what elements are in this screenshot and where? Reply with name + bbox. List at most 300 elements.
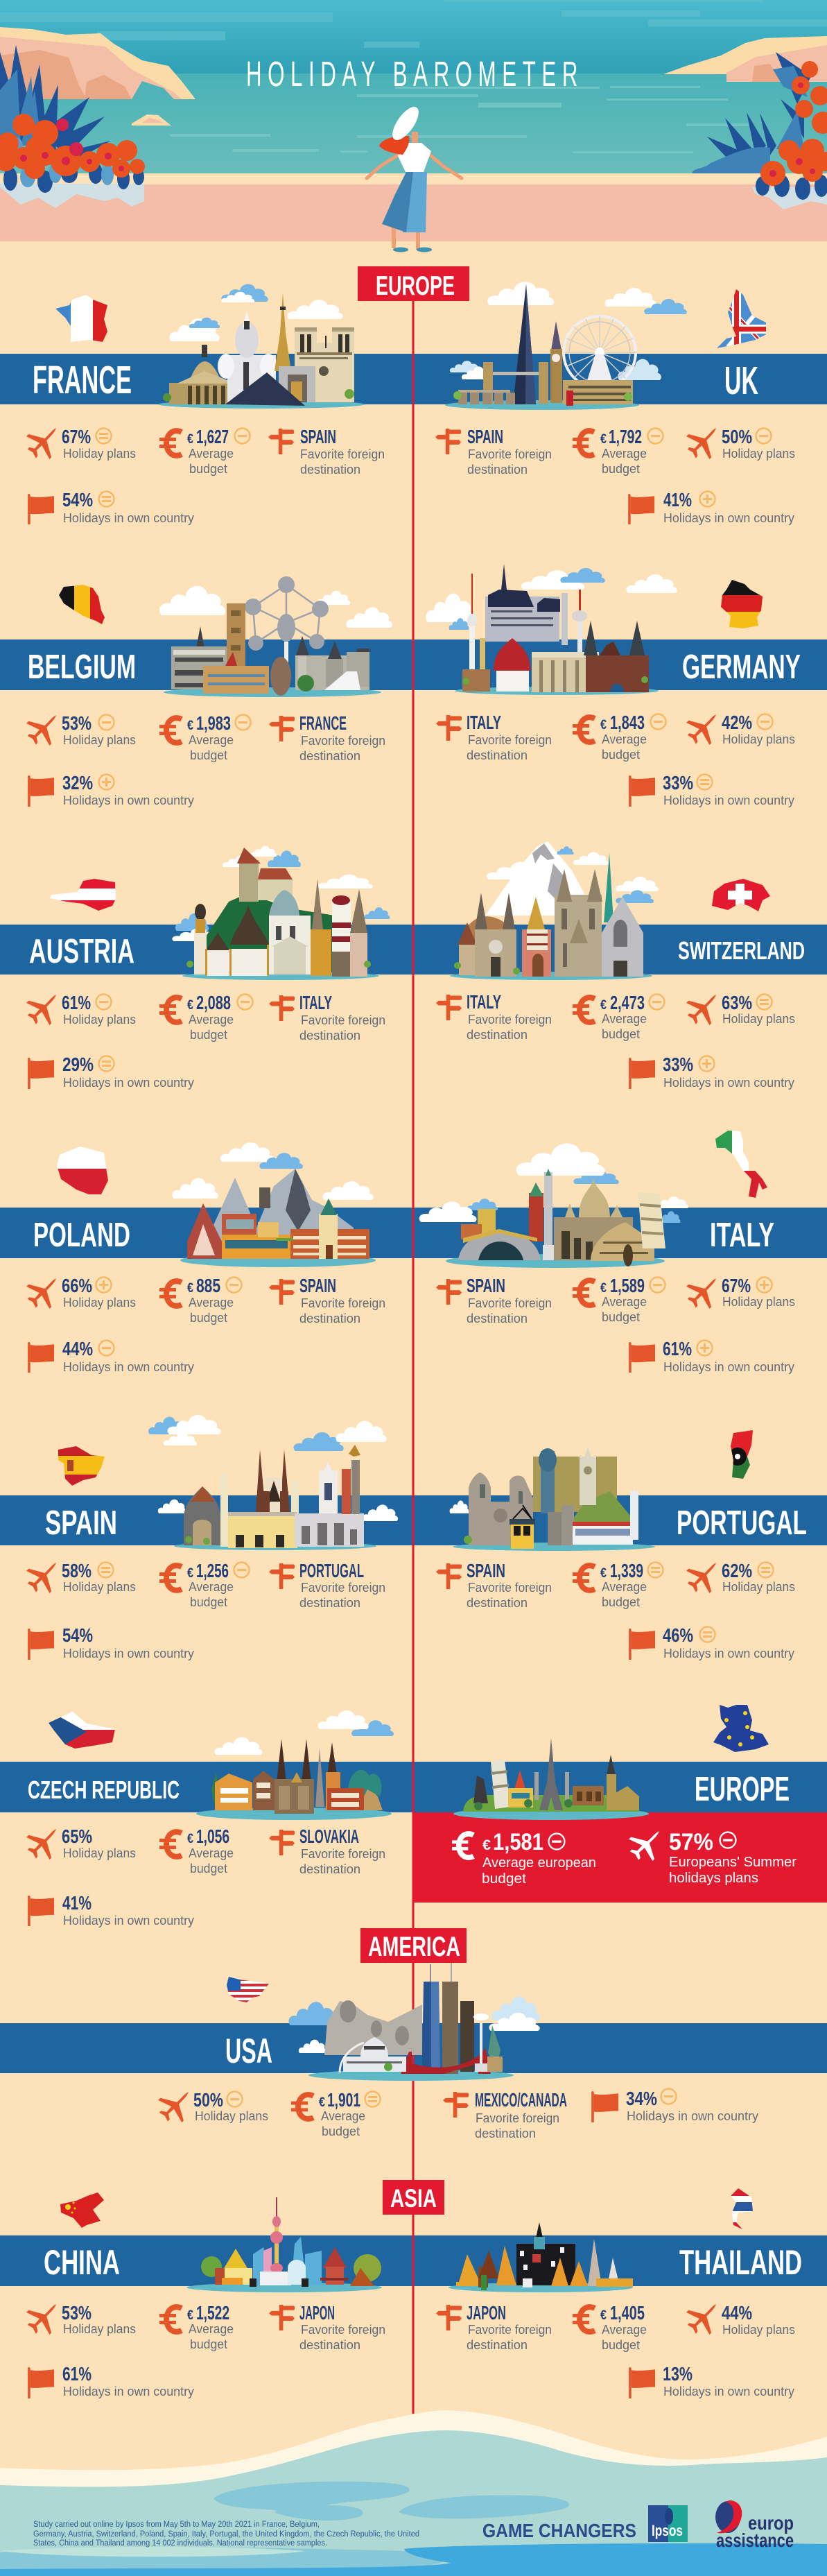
stat: average budget xyxy=(573,2302,647,2352)
map flag: Italy xyxy=(715,1131,767,1198)
stat: average budget: budget xyxy=(602,1310,640,1324)
study note xyxy=(33,2521,419,2548)
stat: average budget: Average xyxy=(189,733,234,747)
stat: holiday plans: Holiday plans xyxy=(63,733,136,747)
stat: average budget: 1,339 xyxy=(610,1560,643,1581)
stat: holidays in own country: Holidays in own country xyxy=(627,2109,758,2123)
stat: average budget: € xyxy=(600,1281,607,1296)
right plants xyxy=(692,52,827,209)
stat: average budget: budget xyxy=(190,2337,227,2351)
stat: favorite foreign destination xyxy=(436,712,552,762)
stat: holiday plans: 58% xyxy=(62,1560,92,1581)
stat: holidays in own country: 29% xyxy=(62,1054,94,1075)
panel: China xyxy=(26,2190,385,2398)
section label: America: AMERICA xyxy=(368,1932,460,1962)
stat: holiday plans: Holiday plans xyxy=(63,2322,136,2336)
stat: favorite foreign destination: Favorite foreign xyxy=(300,447,385,461)
stat: favorite foreign destination: Favorite foreign xyxy=(301,1296,385,1310)
stat: favorite foreign destination: Favorite foreign xyxy=(301,1847,385,1861)
stat: average budget: € xyxy=(187,1281,193,1296)
stat: Europeans' Summer holidays plans xyxy=(629,1829,796,1886)
panel: Czech Republic xyxy=(26,1710,394,1927)
panel: Portugal xyxy=(436,1429,807,1660)
stat: favorite foreign destination xyxy=(269,1826,385,1876)
stat: holidays in own country: 32% xyxy=(62,772,93,793)
stat: average budget xyxy=(573,1560,663,1609)
stat: average budget: budget xyxy=(602,2338,640,2352)
map flag: Belgium xyxy=(59,585,105,624)
stat: average budget: Average xyxy=(602,1295,647,1309)
stat: holiday plans: 67% xyxy=(62,426,91,447)
title: HOLIDAY BAROMETER xyxy=(246,54,584,94)
landmarks: Poland xyxy=(172,1142,376,1267)
panel: Germany xyxy=(426,564,801,807)
stat: average budget xyxy=(573,712,665,762)
stat: average budget: budget xyxy=(602,1027,640,1041)
stat: average budget: € xyxy=(187,719,193,733)
stat: favorite foreign destination xyxy=(436,1275,552,1325)
stat: Europeans' Summer holidays plans: holidays plans xyxy=(669,1871,758,1886)
landmarks: Portugal xyxy=(450,1448,655,1551)
stat: holidays in own country: 33% xyxy=(663,1054,693,1075)
stat: favorite foreign destination: destination xyxy=(467,1312,528,1325)
stat: favorite foreign destination: Favorite foreign xyxy=(468,1296,552,1310)
stat: holiday plans xyxy=(686,2302,795,2337)
stat: favorite foreign destination: destination xyxy=(467,1028,528,1042)
map flag: Spain xyxy=(58,1446,105,1486)
panel: Switzerland xyxy=(436,841,805,1090)
stat: holiday plans: Holiday plans xyxy=(722,2323,795,2337)
stat: favorite foreign destination: ITALY xyxy=(299,992,332,1013)
stat: holiday plans xyxy=(686,712,795,746)
stat: average budget: 1,792 xyxy=(609,426,642,447)
section label: Europe xyxy=(358,266,469,301)
panel: Belgium xyxy=(26,576,392,807)
stat: holiday plans: 44% xyxy=(722,2302,752,2324)
stat: holidays in own country: 41% xyxy=(62,1892,92,1914)
stat: holiday plans: 61% xyxy=(62,992,91,1013)
stat: average budget xyxy=(291,2089,380,2138)
stat: average budget: budget xyxy=(190,748,227,762)
stat: average budget: Average xyxy=(189,1296,234,1310)
stat: average european budget: budget xyxy=(482,1871,526,1887)
stat: favorite foreign destination: SLOVAKIA xyxy=(299,1826,359,1847)
panel: Italy xyxy=(419,1129,795,1374)
woman looking at the sea xyxy=(367,103,462,252)
stat: average budget: € xyxy=(187,1832,193,1846)
blue band: Belgium / Germany xyxy=(0,639,827,690)
stat: favorite foreign destination xyxy=(269,2302,385,2352)
stat: average budget: Average xyxy=(321,2109,365,2123)
stat: holiday plans xyxy=(26,712,136,747)
stat: favorite foreign destination: ITALY xyxy=(467,991,501,1013)
stat: average budget: € xyxy=(600,1566,607,1581)
stat: holiday plans xyxy=(26,2302,136,2336)
stat: holiday plans: Holiday plans xyxy=(722,1295,795,1309)
country name: CZECH REPUBLIC xyxy=(28,1776,180,1804)
stat: average budget: € xyxy=(600,998,607,1013)
country name: POLAND xyxy=(33,1217,130,1254)
map flag: Austria xyxy=(50,879,116,911)
wall and sand xyxy=(0,173,827,241)
stat: holiday plans xyxy=(26,1275,136,1310)
stat: favorite foreign destination: destination xyxy=(475,2127,536,2140)
map flag: China xyxy=(60,2192,104,2228)
stat: average budget: 1,843 xyxy=(610,712,645,733)
country name: SPAIN xyxy=(45,1504,117,1542)
stat: average budget: budget xyxy=(602,1595,640,1609)
stat: holidays in own country xyxy=(28,2363,194,2398)
blue band: China / Thailand xyxy=(0,2235,827,2286)
stat: favorite foreign destination: MEXICO/CANADA xyxy=(475,2089,567,2111)
stat: favorite foreign destination xyxy=(268,426,385,476)
blue band: France / UK xyxy=(0,354,827,404)
stat: holidays in own country xyxy=(629,1338,794,1374)
stat: favorite foreign destination xyxy=(443,2089,567,2140)
stat: average budget: budget xyxy=(189,462,227,476)
stat: holidays in own country: 41% xyxy=(663,489,692,510)
stat: holiday plans xyxy=(686,1560,795,1594)
stat: average european budget xyxy=(452,1829,596,1887)
stat: favorite foreign destination: destination xyxy=(467,463,528,476)
stat: favorite foreign destination: Favorite foreign xyxy=(468,1013,552,1027)
stat: favorite foreign destination: Favorite foreign xyxy=(468,1581,552,1595)
stat: holiday plans: Holiday plans xyxy=(63,447,136,461)
landmarks: Czech Republic xyxy=(196,1710,394,1820)
stat: average budget: budget xyxy=(190,1595,227,1609)
stat: favorite foreign destination: destination xyxy=(299,2338,360,2352)
stat: favorite foreign destination: FRANCE xyxy=(299,712,347,734)
stat: favorite foreign destination: Favorite foreign xyxy=(476,2111,559,2125)
map flag: UK xyxy=(717,289,766,348)
stat: favorite foreign destination: PORTUGAL xyxy=(299,1560,364,1581)
stat: favorite foreign destination xyxy=(269,1275,385,1325)
stat: holiday plans xyxy=(158,2089,268,2123)
stat: average budget: € xyxy=(187,2308,193,2323)
stat: average budget: € xyxy=(600,2308,607,2323)
panel: Thailand xyxy=(436,2187,802,2398)
stat: holiday plans xyxy=(686,426,795,461)
stat: average budget: 2,088 xyxy=(196,992,231,1013)
stat: holidays in own country: 34% xyxy=(626,2088,657,2109)
panel: Poland xyxy=(26,1142,385,1374)
stat: holiday plans: 50% xyxy=(193,2089,223,2111)
logo: europ assistance: assistance xyxy=(716,2530,794,2551)
landmarks: Europe xyxy=(413,1738,827,1903)
stat: holidays in own country: Holidays in own country xyxy=(63,1647,194,1660)
stat: average budget: budget xyxy=(190,1028,227,1042)
stat: average budget: 885 xyxy=(196,1275,220,1296)
stat: holidays in own country: Holidays in own country xyxy=(63,1076,194,1090)
stat: Europeans' Summer holidays plans: 57% xyxy=(669,1829,713,1855)
map flag: USA xyxy=(227,1977,269,2002)
stat: holiday plans: Holiday plans xyxy=(722,1580,795,1594)
stat: holiday plans: Holiday plans xyxy=(722,447,795,461)
stat: favorite foreign destination: destination xyxy=(300,463,360,476)
section label: Asia: ASIA xyxy=(390,2184,437,2213)
stat: holiday plans: Holiday plans xyxy=(63,1580,136,1594)
panel: Europe summary xyxy=(413,1703,827,1903)
stat: average budget: € xyxy=(187,1566,193,1581)
stat: favorite foreign destination xyxy=(436,1560,552,1610)
stat: holidays in own country xyxy=(28,489,194,525)
country name: CHINA xyxy=(44,2243,120,2282)
landmarks: Italy xyxy=(419,1144,688,1268)
study note: Study carried out online by Ipsos from May 5th to May 20th 2021 in France, Belgium, xyxy=(33,2521,320,2529)
logo: Ipsos xyxy=(648,2505,688,2542)
stat: holiday plans: 66% xyxy=(62,1275,92,1296)
stat: holidays in own country xyxy=(28,772,194,807)
panel: UK xyxy=(435,282,795,525)
logo: europ assistance xyxy=(715,2500,794,2551)
stat: average budget: budget xyxy=(322,2124,360,2138)
stat: favorite foreign destination xyxy=(436,991,552,1042)
stat: favorite foreign destination: Favorite foreign xyxy=(301,1581,385,1595)
left rock xyxy=(0,27,195,126)
stat: holiday plans xyxy=(686,1275,795,1309)
stat: holidays in own country xyxy=(28,1338,194,1374)
stat: favorite foreign destination: destination xyxy=(467,1596,528,1610)
stat: average budget: budget xyxy=(190,1311,227,1325)
stat: holiday plans: 42% xyxy=(722,712,752,733)
stat: average budget xyxy=(159,712,251,762)
stat: holidays in own country xyxy=(591,2088,758,2123)
stat: average budget: € xyxy=(600,718,607,732)
panel: Spain xyxy=(26,1415,398,1660)
stat: holiday plans: Holiday plans xyxy=(63,1846,136,1860)
left plants xyxy=(0,45,145,208)
landmarks: Belgium xyxy=(159,576,392,697)
right rock xyxy=(663,36,827,82)
stat: favorite foreign destination xyxy=(435,426,552,476)
blue band: Austria / Switzerland xyxy=(0,925,827,974)
map flag: Germany xyxy=(721,580,763,628)
stat: average budget xyxy=(159,2302,234,2351)
stat: favorite foreign destination: Favorite foreign xyxy=(468,2323,552,2337)
landmarks: Thailand xyxy=(449,2222,633,2292)
stat: favorite foreign destination: JAPON xyxy=(299,2302,335,2324)
landmarks: Germany xyxy=(426,564,677,695)
stat: holiday plans: 53% xyxy=(62,2302,92,2324)
stat: favorite foreign destination: destination xyxy=(299,1029,360,1042)
stat: holidays in own country: Holidays in own country xyxy=(63,511,194,525)
stat: holidays in own country: Holidays in own country xyxy=(663,1076,794,1090)
stat: holidays in own country xyxy=(28,1624,194,1660)
stat: holiday plans xyxy=(686,992,795,1026)
stat: average budget: € xyxy=(600,432,607,447)
stat: holidays in own country: Holidays in own country xyxy=(63,1360,194,1374)
stat: average budget xyxy=(159,1275,241,1325)
stat: holidays in own country: Holidays in own country xyxy=(63,2385,194,2398)
central timeline xyxy=(412,298,415,2414)
stat: favorite foreign destination: destination xyxy=(299,749,360,763)
stat: holidays in own country xyxy=(629,1624,794,1660)
section label: America xyxy=(360,1928,467,1963)
stat: favorite foreign destination: Favorite foreign xyxy=(301,734,385,748)
stat: favorite foreign destination: SPAIN xyxy=(467,426,503,447)
stat: holidays in own country xyxy=(629,772,794,807)
stat: favorite foreign destination: destination xyxy=(299,1596,360,1610)
stat: holidays in own country: 13% xyxy=(663,2363,693,2385)
stat: holidays in own country xyxy=(28,1054,194,1090)
landmarks: France xyxy=(158,284,365,409)
stat: average budget xyxy=(573,992,664,1041)
stat: holiday plans: 65% xyxy=(62,1826,92,1847)
stat: holiday plans xyxy=(26,1560,136,1594)
stat: average budget: Average xyxy=(602,2323,647,2337)
map flag: Switzerland xyxy=(712,879,770,911)
stat: holidays in own country xyxy=(629,2363,794,2398)
logo: europ assistance: europ xyxy=(748,2512,794,2534)
stat: average budget: € xyxy=(187,998,193,1013)
stat: holiday plans: 53% xyxy=(62,712,92,734)
map flag: Portugal xyxy=(731,1430,753,1479)
stat: favorite foreign destination: destination xyxy=(467,2338,528,2352)
stat: average budget: Average xyxy=(189,1580,234,1594)
stat: average budget: Average xyxy=(189,447,234,461)
stat: favorite foreign destination: destination xyxy=(467,748,528,762)
stat: favorite foreign destination: Favorite foreign xyxy=(468,447,552,461)
stat: favorite foreign destination: Favorite foreign xyxy=(468,733,552,747)
stat: favorite foreign destination xyxy=(269,992,385,1042)
hero beach scene xyxy=(0,0,827,252)
stat: favorite foreign destination: Favorite foreign xyxy=(301,1013,385,1027)
country name: ITALY xyxy=(710,1217,774,1254)
stat: holidays in own country: Holidays in own country xyxy=(663,1360,794,1374)
blue band: Czech Republic / Europe xyxy=(0,1762,827,1812)
study note: Germany, Austria, Switzerland, Poland, Spain, Italy, Portugal, the United Kingdom, the Czech Republic, the United xyxy=(33,2530,419,2539)
landmarks: Spain xyxy=(148,1415,398,1550)
landmarks: UK xyxy=(445,282,687,410)
blue band: USA xyxy=(0,2023,827,2073)
stat: holidays in own country: Holidays in own country xyxy=(63,793,194,807)
stat: average european budget: € xyxy=(482,1837,491,1853)
stat: holiday plans: 63% xyxy=(722,992,752,1013)
stat: holidays in own country: 44% xyxy=(62,1338,93,1359)
country name: FRANCE xyxy=(33,358,132,402)
stat: holidays in own country xyxy=(628,489,794,525)
stat: holidays in own country: 61% xyxy=(663,1338,692,1359)
stat: average budget: budget xyxy=(602,748,640,762)
stat: average budget: 1,627 xyxy=(196,426,229,447)
panel: Austria xyxy=(26,846,390,1090)
stat: average european budget: Average european xyxy=(482,1855,596,1871)
landmarks: Switzerland xyxy=(450,841,659,980)
stat: holidays in own country xyxy=(28,1892,194,1927)
country name: UK xyxy=(724,359,758,403)
stat: average budget xyxy=(159,1826,234,1875)
stat: average budget: 1,256 xyxy=(196,1560,229,1581)
stat: holidays in own country: Holidays in own country xyxy=(63,1914,194,1927)
landmarks: USA xyxy=(288,1963,540,2081)
stat: favorite foreign destination: SPAIN xyxy=(299,1275,336,1296)
stat: favorite foreign destination: ITALY xyxy=(467,712,501,733)
map flag: Thailand xyxy=(731,2188,753,2229)
game changers slogan: GAME CHANGERS xyxy=(482,2520,636,2541)
stat: favorite foreign destination: SPAIN xyxy=(300,426,336,447)
stat: average budget: budget xyxy=(190,1862,227,1875)
stat: favorite foreign destination: SPAIN xyxy=(467,1275,505,1296)
study note: States, China and Thailand among 14 002 individuals. National representative samples. xyxy=(33,2539,327,2548)
stat: holidays in own country: Holidays in own country xyxy=(663,793,794,807)
stat: holidays in own country: Holidays in own country xyxy=(663,1647,794,1660)
panel: USA xyxy=(158,1963,758,2140)
stat: holiday plans: Holiday plans xyxy=(195,2109,268,2123)
country name: AUSTRIA xyxy=(29,933,134,970)
country name: USA xyxy=(225,2032,272,2070)
stat: favorite foreign destination: SPAIN xyxy=(467,1560,505,1581)
stat: average budget: € xyxy=(319,2095,325,2110)
stat: holiday plans: Holiday plans xyxy=(722,1012,795,1026)
section label: Asia xyxy=(383,2180,444,2215)
stat: favorite foreign destination xyxy=(269,1560,385,1610)
section label: Europe: EUROPE xyxy=(376,271,455,301)
map flag: Poland xyxy=(57,1147,108,1194)
stat: average budget xyxy=(159,992,252,1042)
stat: average budget: Average xyxy=(189,2322,234,2336)
blue band: Spain / Portugal xyxy=(0,1495,827,1545)
stat: holidays in own country: 33% xyxy=(663,772,693,793)
stat: holiday plans: Holiday plans xyxy=(722,732,795,746)
footer beach waves xyxy=(0,2410,827,2576)
map flag: France xyxy=(55,295,107,342)
stat: holidays in own country xyxy=(629,1054,794,1090)
map flag: Europe xyxy=(713,1705,769,1752)
stat: average budget xyxy=(159,426,250,476)
stat: average budget: 2,473 xyxy=(610,992,645,1013)
stat: holiday plans: 62% xyxy=(722,1560,752,1581)
stat: average budget: Average xyxy=(602,1012,647,1026)
stat: average budget: 1,589 xyxy=(610,1275,645,1296)
map flag: Czech Republic xyxy=(49,1711,115,1749)
stat: average budget: Average xyxy=(189,1846,234,1860)
stat: favorite foreign destination xyxy=(269,712,385,763)
stat: holiday plans xyxy=(26,1826,136,1860)
stat: favorite foreign destination: destination xyxy=(299,1862,360,1876)
stat: average budget: Average xyxy=(602,1580,647,1594)
stat: average budget xyxy=(573,1275,665,1324)
stat: holidays in own country: 61% xyxy=(62,2363,92,2385)
stat: holiday plans xyxy=(26,426,136,461)
stat: average budget: 1,983 xyxy=(196,712,231,734)
stat: holidays in own country: 54% xyxy=(62,1624,93,1646)
landmarks: Austria xyxy=(172,846,390,980)
stat: average budget xyxy=(573,426,663,476)
stat: average budget: Average xyxy=(602,447,647,461)
landmarks: China xyxy=(186,2197,382,2292)
stat: average budget: 1,405 xyxy=(610,2302,645,2324)
stat: holiday plans: Holiday plans xyxy=(63,1296,136,1310)
stat: holidays in own country: 54% xyxy=(62,489,93,510)
stat: holidays in own country: Holidays in own country xyxy=(663,2385,794,2398)
stat: average budget: € xyxy=(187,432,193,447)
stat: favorite foreign destination: destination xyxy=(299,1312,360,1325)
blue band: Poland / Italy xyxy=(0,1208,827,1258)
stat: holiday plans: Holiday plans xyxy=(63,1013,136,1027)
stat: holidays in own country: Holidays in own country xyxy=(663,511,794,525)
stat: average budget: Average xyxy=(189,1013,234,1027)
stat: average budget: 1,901 xyxy=(327,2089,360,2111)
stat: favorite foreign destination: JAPON xyxy=(467,2302,506,2324)
stat: Europeans' Summer holidays plans: Europeans' Summer xyxy=(669,1855,796,1870)
stat: favorite foreign destination xyxy=(436,2302,552,2352)
stat: favorite foreign destination: Favorite foreign xyxy=(301,2323,385,2337)
stat: average budget: budget xyxy=(602,462,640,476)
stat: average budget: 1,056 xyxy=(196,1826,229,1847)
stat: holiday plans: 50% xyxy=(722,426,752,447)
panel: France xyxy=(26,284,385,525)
logo: Ipsos: Ipsos xyxy=(652,2522,683,2539)
